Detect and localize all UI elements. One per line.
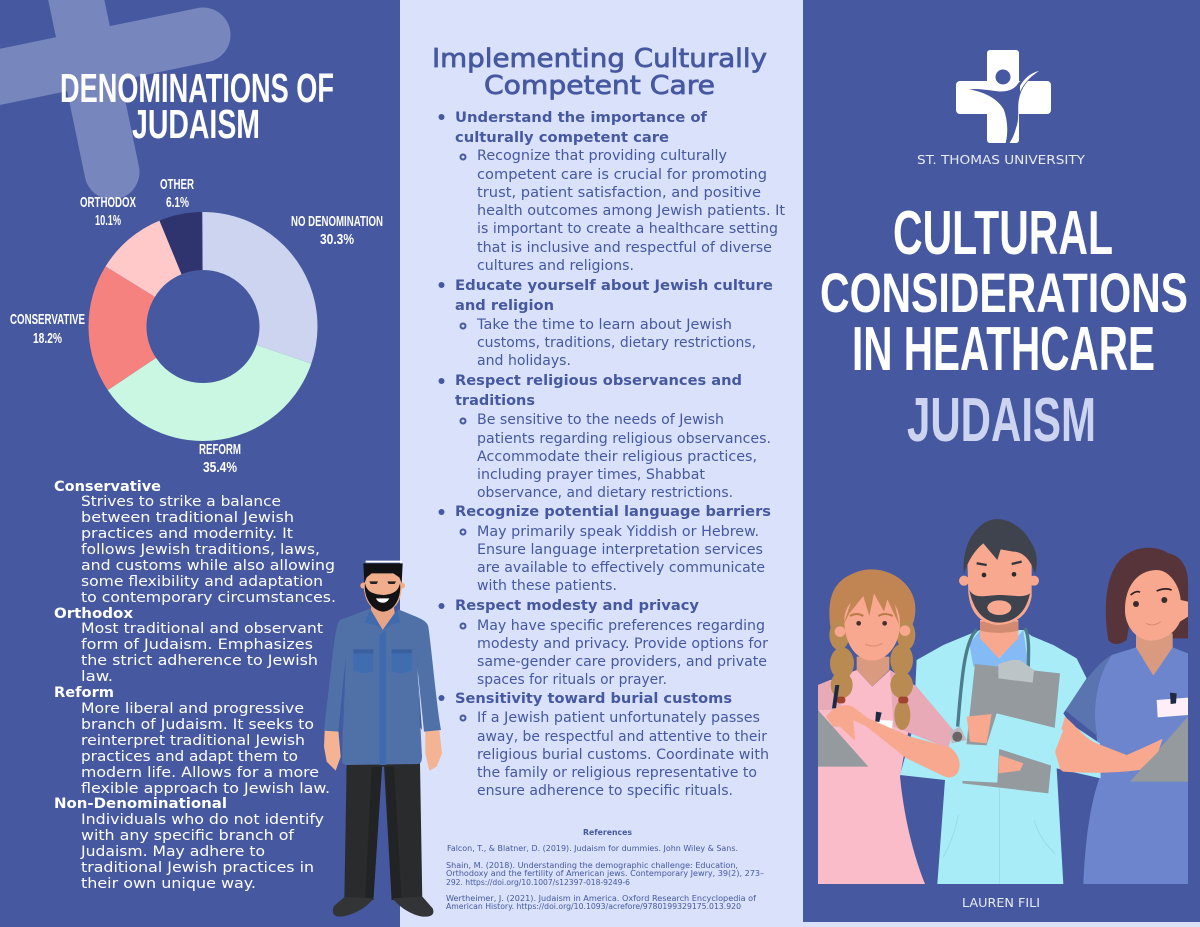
neck — [370, 603, 395, 630]
text block: denomination definitions: traditional Jewish practices in — [81, 860, 314, 876]
text block: denomination definitions: and customs while also allowing — [81, 558, 335, 574]
hair and beard — [363, 563, 403, 612]
list: care recommendations: Ensure language interpretation services — [477, 542, 763, 558]
heading: implementing culturally competent care: Competent Care — [484, 71, 715, 101]
list: care recommendations: If a Jewish patient unfortunately passes — [477, 710, 760, 726]
text block: references: American History. https://doi.org/10.1093/acrefore/9780199329175.013.920 — [446, 902, 741, 911]
text block: denomination definitions: Non-Denominational — [54, 796, 227, 812]
doctor in light blue coat — [900, 519, 1163, 884]
chart labels: ORTHODOX — [80, 194, 136, 211]
title: cultural considerations in heathcare — [820, 199, 1188, 384]
text block: references: References — [583, 828, 632, 837]
text block: denomination definitions: Strives to strike a balance — [81, 494, 281, 510]
list: care recommendations: observance, and dietary restrictions. — [477, 485, 733, 501]
text block: denomination definitions: Judaism. May adhere to — [80, 844, 265, 860]
list: care recommendations: May primarily speak Yiddish or Hebrew. — [477, 524, 759, 540]
panel: denominations of Judaism — [0, 0, 400, 927]
heading: implementing culturally competent care — [432, 44, 767, 101]
text block: denomination definitions: branch of Judaism. It seeks to — [81, 717, 314, 733]
text block: denomination definitions: Individuals who do not identify — [81, 812, 324, 828]
shoes — [333, 897, 433, 917]
list: care recommendations: with these patients. — [477, 578, 617, 594]
text block: denomination definitions: flexible approach to Jewish law. — [81, 781, 330, 797]
illustration: three healthcare workers — [818, 519, 1188, 884]
list: care recommendations: Respect modesty and privacy — [455, 598, 699, 614]
text block: references: Shain, M. (2018). Understanding the demographic challenge: Education, — [446, 861, 738, 870]
chart labels — [10, 176, 383, 476]
text block: denomination definitions: form of Judaism. Emphasizes — [81, 637, 313, 653]
text block: denomination definitions: Reform — [54, 685, 114, 701]
heading: denominations of Judaism: JUDAISM — [132, 101, 260, 147]
list: care recommendations: cultures and religions. — [477, 258, 634, 274]
list: care recommendations: Recognize potential language barriers — [455, 504, 771, 520]
list: care recommendations: spaces for rituals or prayer. — [477, 672, 667, 688]
heading: denominations of Judaism — [60, 65, 334, 147]
list: care recommendations — [455, 110, 786, 799]
list: care recommendations: same-gender care providers, and private — [477, 654, 767, 670]
text block: denomination definitions: their own unique way. — [81, 876, 256, 892]
text block: denomination definitions: follows Jewish traditions, laws, — [81, 542, 320, 558]
subtitle: Judaism: JUDAISM — [907, 386, 1096, 455]
text block: references: Orthodoxy and the fertility of American jews. Contemporary Jewry, 39(2), 273– — [446, 869, 764, 878]
list: care recommendations: Respect religious observances and — [455, 373, 742, 389]
list: care recommendations: culturally competent care — [455, 130, 669, 146]
icon: background cross — [0, 0, 203, 172]
shirt — [324, 609, 441, 765]
illustration: man in blue shirt — [324, 561, 442, 917]
list: care recommendations: are available to effectively communicate — [477, 560, 765, 576]
donut chart: denomination shares — [118, 241, 288, 412]
text block: references — [446, 828, 764, 911]
list: care recommendations: health outcomes among Jewish patients. It — [477, 203, 786, 219]
list: care recommendations: and holidays. — [477, 353, 571, 369]
text block: denomination definitions: some flexibility and adaptation — [81, 574, 323, 590]
nurse in pink scrubs — [818, 569, 999, 884]
chart labels: 35.4% — [203, 459, 237, 476]
list: care recommendations: Accommodate their religious practices, — [477, 449, 757, 465]
chart labels: REFORM — [199, 441, 241, 458]
face — [360, 583, 366, 589]
list: care recommendations: modesty and privacy. Provide options for — [477, 636, 768, 652]
text block: denomination definitions: to contemporary circumstances. — [81, 590, 336, 606]
list: care recommendations: customs, traditions, dietary restrictions, — [477, 335, 756, 351]
list: care recommendations: is important to create a healthcare setting — [477, 221, 778, 237]
chart labels: 10.1% — [95, 212, 121, 229]
author name: LAUREN FILI — [962, 896, 1040, 910]
text block: denomination definitions: between traditional Jewish — [81, 510, 294, 526]
trousers — [344, 763, 422, 902]
nurse in blue scrubs — [1065, 548, 1188, 884]
list: care recommendations: trust, patient satisfaction, and positive — [477, 185, 761, 201]
heading: denominations of Judaism: DENOMINATIONS OF — [60, 65, 334, 111]
chart labels: NO DENOMINATION — [291, 213, 383, 230]
chart labels: 30.3% — [320, 231, 354, 248]
text block: denomination definitions — [54, 479, 336, 892]
icon: St. Thomas University cross logo — [956, 50, 1051, 152]
text block: denomination definitions: Conservative — [54, 479, 161, 495]
text block: references: Wertheimer, J. (2021). Judaism in America. Oxford Research Encyclopedia of — [446, 894, 756, 903]
list: care recommendations: the family or religious representative to — [477, 765, 757, 781]
list: care recommendations: Sensitivity toward burial customs — [455, 691, 732, 707]
text block: denomination definitions: Most traditional and observant — [81, 621, 323, 637]
list: care recommendations: Take the time to learn about Jewish — [476, 317, 732, 333]
hands — [324, 730, 442, 771]
text block: denomination definitions: practices and modernity. It — [81, 526, 293, 542]
list: care recommendations: away, be respectful and attentive to their — [477, 729, 767, 745]
text block: denomination definitions: law. — [81, 669, 113, 685]
chart labels: 6.1% — [166, 194, 189, 211]
list: care recommendations: including prayer times, Shabbat — [477, 467, 706, 483]
list: care recommendations: traditions — [455, 393, 535, 409]
list: care recommendations: Understand the importance of — [455, 110, 708, 126]
chart labels: CONSERVATIVE — [10, 311, 85, 328]
list: care recommendations: that is inclusive and respectful of diverse — [477, 240, 772, 256]
text block: denomination definitions: Orthodox — [54, 606, 134, 622]
text block: references: 292. https://doi.org/10.1007/s12397-018-9249-6 — [446, 878, 630, 887]
list: care recommendations: Recognize that providing culturally — [477, 148, 727, 164]
chart labels: 18.2% — [33, 330, 62, 347]
list: care recommendations: May have specific preferences regarding — [477, 618, 765, 634]
list: care recommendations: Be sensitive to the needs of Jewish — [477, 412, 724, 428]
list: care recommendations: Educate yourself about Jewish culture — [455, 278, 773, 294]
text block: denomination definitions: modern life. Allows for a more — [81, 765, 319, 781]
logo text: ST. THOMAS UNIVERSITY — [917, 153, 1086, 167]
text block: denomination definitions: More liberal and progressive — [81, 701, 304, 717]
heading: implementing culturally competent care: Implementing Culturally — [432, 44, 767, 74]
panel: implementing culturally competent care — [432, 44, 786, 911]
list: care recommendations: competent care is crucial for promoting — [477, 167, 767, 183]
text block: denomination definitions: the strict adherence to Jewish — [81, 653, 318, 669]
chart labels: OTHER — [160, 176, 194, 193]
panel: cover — [803, 0, 1200, 922]
text block: references: Falcon, T., & Blatner, D. (2019). Judaism for dummies. John Wiley & Sans. — [447, 844, 738, 853]
text block: denomination definitions: reinterpret traditional Jewish — [81, 733, 305, 749]
list: care recommendations: religious burial customs. Coordinate with — [477, 747, 769, 763]
list: care recommendations: ensure adherence to specific rituals. — [477, 783, 733, 799]
list: care recommendations: patients regarding religious observances. — [477, 431, 771, 447]
list: care recommendations: and religion — [455, 298, 554, 314]
text block: denomination definitions: with any specific branch of — [81, 828, 295, 844]
text block: denomination definitions: practices and adapt them to — [81, 749, 298, 765]
list: bullet markers — [438, 114, 466, 720]
